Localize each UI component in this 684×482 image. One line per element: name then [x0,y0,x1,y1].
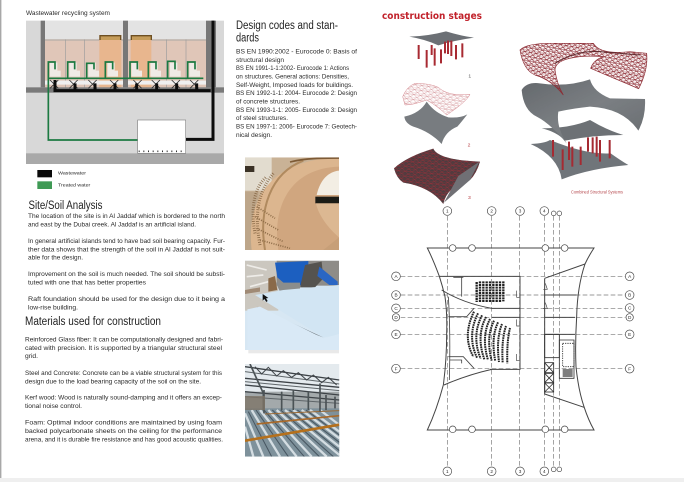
columns [553,137,610,170]
bubble labels [394,209,632,474]
text block: site/soil analysis: and east by the Dubai creek. Al Jaddaf is an artificial island. [28,222,196,228]
bubble labels: E [628,332,631,337]
text block: site/soil analysis: In general artificial islands tend to have bad soil bearing capacity. Fur- [28,238,225,245]
text block: design codes and standards: BS EN 1993-1-1: 2005- Eurocode 3: Design [236,107,357,114]
text block: design codes and standards: on structures. General actions: Densities, [236,74,349,80]
text block: design codes and standards: structural design [236,57,284,64]
text block: materials used for construction: Steel and Concrete: Concrete can be a viable structural system for this [25,370,222,377]
legend: Treated water [58,183,91,188]
text block: site/soil analysis: able for the design. [28,254,83,262]
upper seating [477,281,503,303]
section diagram [26,21,224,164]
text block: design codes and standards: Design codes and stan- [236,20,338,32]
text block: design codes and standards: Self-Weight, Imposed loads for buildings. [236,82,353,89]
text block: materials used for construction: Foam: Optimal indoor conditions are maintained by using foam [25,420,222,426]
bubble labels: 3 [519,469,522,474]
text block: materials used for construction: Materials used for construction [25,316,161,328]
base plate [531,140,628,179]
caption: combined structural systems: Combined Structural Systems [571,189,623,195]
text block: site/soil analysis: Raft foundation should be used for the design due to it being a [28,296,225,303]
bubble labels: A [628,274,632,279]
bubble labels: E [394,332,398,337]
bubble labels: 2 [490,469,493,474]
photo: steel and concrete deck [245,364,339,457]
text block: materials used for construction [25,316,223,444]
stage 3: netted surface [394,149,480,204]
text block: design codes and standards [236,20,357,139]
core: stairs and lifts [545,334,574,392]
text block: site/soil analysis: tuted with one that has better properties [28,280,146,286]
text block: site/soil analysis: ther data shows that the strength of the soil in Al Jaddaf is not suit- [28,246,225,254]
lattice [520,43,647,95]
photo: polycarbonate foam sheet [245,261,339,353]
text block: site/soil analysis: Site/Soil Analysis [28,200,103,212]
label: stage 3: 3 [468,195,471,201]
text block: site/soil analysis: Improvement on the soil is much needed. The soil should be substi- [28,271,225,278]
text block: design codes and standards: BS EN 1991-1-1:2002- Eurocode 1: Actions [236,65,349,72]
bubble labels: C [628,306,632,311]
legend [37,170,91,189]
bubble labels: D [628,315,632,320]
text block: design codes and standards: of concrete structures. [236,98,300,106]
bubble labels: 1 [446,469,449,474]
text block: materials used for construction: cated with precision. It is supported by a triangular structural steel [25,345,222,352]
label: stage 1: 1 [468,73,471,79]
stage 1: columns and roof [409,31,474,68]
treated water pipe [48,61,203,140]
text block: materials used for construction: backed polycarbonate sheets on the ceiling for the performance [25,428,222,435]
photo: kerf wood [245,157,339,250]
toilets [50,63,200,77]
middle plate [542,120,623,141]
label: stage 2: 2 [468,143,471,149]
panel: construction stage diagrams [394,31,647,204]
bubble labels: C [394,306,398,311]
bubble labels: F [395,366,398,371]
text block: materials used for construction: grid. [25,353,38,360]
bubble labels: 4 [543,209,546,214]
grid lines [401,216,625,467]
heading: construction stages: construction stages [382,11,482,22]
bubble labels: 1 [446,209,449,214]
bubble labels: 3 [519,209,522,214]
text block: design codes and standards: BS EN 1997-1: 2006- Eurocode 7: Geotech- [236,124,357,130]
text block: materials used for construction: Kerf wood: Wood is naturally sound-damping and it offers an excep- [25,394,222,402]
text block: design codes and standards: BS EN 1990:2002 - Eurocode 0: Basis of [236,48,357,56]
bubble labels: B [394,293,398,298]
combined structural system [520,43,647,179]
text block: design codes and standards: BS EN 1992-1-1: 2004- Eurocode 2: Design [236,90,357,97]
text block: site/soil analysis: low-rise building. [28,304,78,312]
curved shell [522,79,645,143]
bubble labels: F [628,366,631,371]
text block: site/soil analysis: The location of the site is in Al Jaddaf which is bordered to the north [28,213,225,220]
text block: site/soil analysis [28,200,225,312]
text block: design codes and standards: dards [236,32,259,44]
bubble labels: 4 [543,469,546,474]
auditorium seating [468,312,510,363]
building outline [427,248,594,430]
treatment tank [138,120,186,153]
photo column [245,157,339,457]
panel: wastewater recycling system [26,10,224,189]
heading: wastewater recycling system: Wastewater recycling system [26,10,110,17]
text block: materials used for construction: Reinforced Glass fiber: It can be computationally designed and fabri- [25,336,223,344]
text block: materials used for construction: design due to the load bearing capacity of the soil on the site. [25,378,201,386]
legend: Wastewater [58,170,86,175]
bubble labels: 2 [490,209,493,214]
bubble labels: D [394,315,398,320]
bubble labels: A [394,274,398,279]
stage 2: surface and lattice [403,83,470,144]
grid bubbles [392,207,634,476]
cursor [263,294,268,302]
text block: design codes and standards: of steel structures. [236,115,288,122]
floor plan [392,207,634,476]
wastewater pipe [55,21,213,139]
text block: materials used for construction: arena, and it is durable fire resistance and has good acoustic qualities. [25,436,223,444]
bubble labels: B [628,293,631,298]
text block: design codes and standards: nical design. [236,132,272,139]
text block: materials used for construction: tional noise control. [25,403,82,410]
